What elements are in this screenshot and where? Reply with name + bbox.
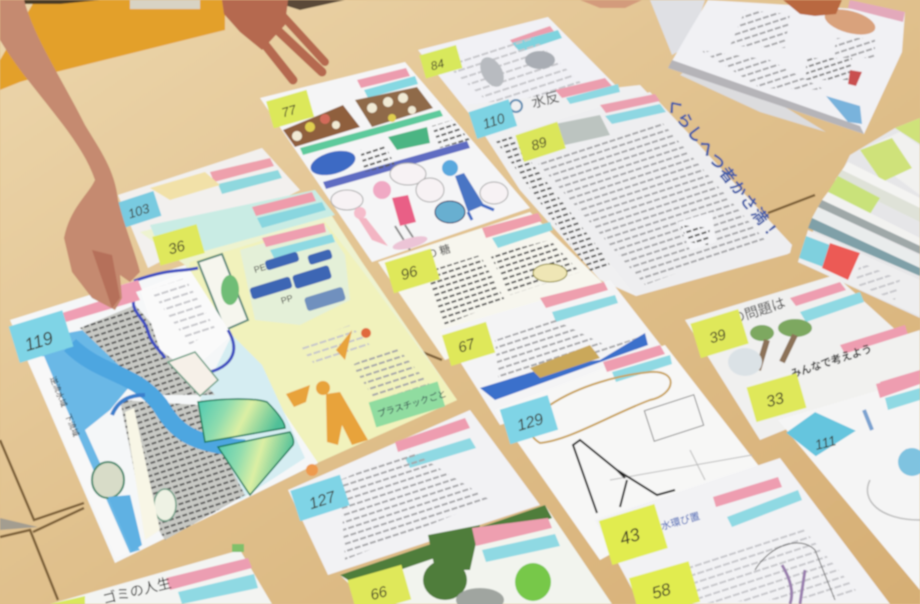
poster 66 [340,505,612,604]
poster 84 [418,17,642,152]
pen: bottom left [0,518,38,530]
hand: top right [783,0,842,16]
poster: ゴミの人生 [50,544,272,604]
sticky note 103: 103 [126,200,152,222]
green strip [300,110,443,155]
figure: blue person [442,160,494,220]
sticky note 77: 77 [280,102,299,120]
poster 103 [117,148,300,268]
poster 43: 水環び置 [660,510,701,533]
sticky note 111: 111 [813,432,838,453]
sticky note 77 [266,90,314,128]
bag [435,201,465,223]
sticky note 110: 110 [481,110,507,132]
sticky note 67 [442,322,495,366]
poster 36 yellow page: PE [253,262,267,275]
text bullets [352,345,430,400]
figure: pink person [373,181,429,252]
sticky note 129: 129 [515,411,546,435]
poster 127 [288,410,540,575]
pale sea [200,335,305,500]
sticky note 89: 89 [529,133,549,154]
poster 129 [495,345,762,560]
sticky note 96 [385,249,440,293]
sticky note 36 [152,224,205,266]
table seams [0,195,815,600]
sticky note 119 [9,310,73,363]
blue sea [30,325,140,553]
bottom blue water [108,495,142,552]
green callout [369,380,450,427]
sticky note 84: 84 [429,56,446,73]
sticky note 111 [783,404,859,462]
poster 77 [260,62,530,262]
town [80,305,245,540]
sticky note 127 [290,475,350,521]
poster 39: の問題は [729,294,787,327]
blue ship [480,333,648,400]
sticky note 129 [500,395,558,444]
poster stack: right [798,118,920,318]
plastic icons [249,249,346,312]
trees [750,319,812,370]
sticky note 33 [747,373,806,422]
poster 89 [510,92,792,296]
poster 39 [685,275,920,440]
sticky note 103 [117,191,161,227]
sun [306,464,318,476]
sticky note 43: 43 [617,524,642,549]
poster 96 [378,212,610,360]
river [70,345,245,448]
speech outline [532,372,671,443]
sticky note 127: 127 [307,488,339,513]
poster 110 [465,78,792,296]
sticky note 89 [515,122,566,162]
sticky note 66: 66 [368,583,390,604]
sticky note 58 [629,561,700,604]
poster 33 [745,330,920,440]
green fan shapes [198,399,285,442]
hand: top [222,0,325,80]
sticky note 67: 67 [456,335,478,357]
sticky note 33: 33 [764,390,786,411]
figure: small pink person [354,207,388,246]
heading: vertical title strip: くらしへつ者かさ満！ [662,95,782,242]
blue label [308,146,358,180]
food panels [283,105,360,147]
poster 36 yellow page [140,190,457,463]
poster 111 [778,372,920,590]
sticky note 36: 36 [166,237,188,259]
poster 67 [440,280,680,425]
white margin [28,356,128,558]
poster 96: D 糖 [427,242,452,261]
forearm: top centre [580,0,642,8]
poster stack: top right [650,0,905,134]
inner white panel with blue frame [140,270,232,372]
poster 119 [9,265,318,563]
sticky note 39 [690,309,749,358]
poster 43 [595,458,890,604]
poster 119: 逆流水域 下流域 [48,375,81,438]
sticky note 43 [599,504,668,565]
sticky note 110 [469,99,517,139]
green callout: プラスチックごと [376,388,448,419]
speech bubbles [331,163,508,210]
map illustration [198,254,248,330]
poster 36 yellow page: PP [280,293,294,306]
colour labels [357,68,410,88]
poster 110: 水反 [530,88,561,111]
sticky note 39: 39 [707,326,729,347]
pink label [62,290,140,322]
black graph line [573,440,675,513]
sticky note 96: 96 [399,263,420,284]
sticky note 66 [348,565,411,604]
orange chair behind table [0,0,345,90]
orange fish and figure [286,328,371,445]
sticky note 119: 119 [22,328,55,355]
poster 33: みんなで考えよう [789,342,874,381]
hand and arm: left [0,0,140,310]
sticky note 84 [419,45,463,78]
sticky note 58: 58 [650,580,673,603]
